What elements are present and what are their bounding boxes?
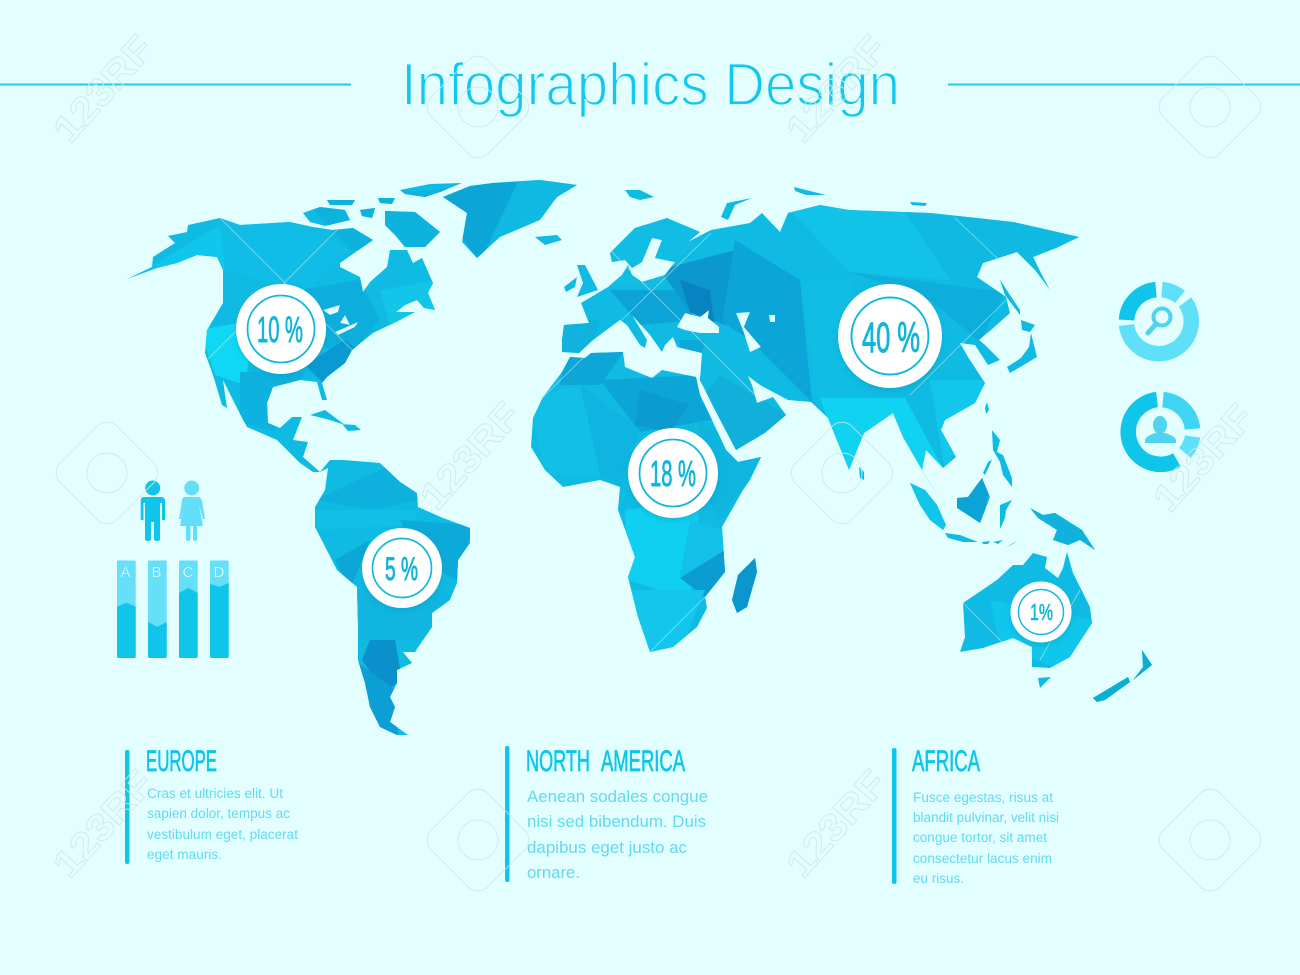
bar chart: A B C D: A xyxy=(120,564,131,581)
watermarks: 123RF xyxy=(778,763,895,886)
callout: 10%: 10 % xyxy=(257,309,303,350)
header rule left xyxy=(0,84,351,86)
text block: Africa: Fusce egestas, risus at xyxy=(913,790,1053,805)
text block: North America: ornare. xyxy=(527,863,580,882)
watermarks: 123RF xyxy=(412,395,529,518)
text block: Africa: blandit pulvinar, velit nisi xyxy=(913,810,1059,825)
text block: Europe xyxy=(125,745,298,864)
callout: 40%: 40 % xyxy=(862,314,920,362)
text block: Africa: AFRICA xyxy=(912,745,980,778)
icon: woman xyxy=(179,480,205,541)
callout: 1% xyxy=(1010,582,1072,642)
callout: 40% xyxy=(838,284,942,388)
text block: Europe: EUROPE xyxy=(146,745,217,778)
watermarks: 123RF xyxy=(45,763,162,886)
text block: Europe: vestibulum eget, placerat xyxy=(147,827,298,842)
callout: 18% xyxy=(628,428,718,518)
text block: North America: dapibus eget justo ac xyxy=(527,838,687,857)
icon: user donut xyxy=(1128,400,1192,464)
icon: search donut xyxy=(1126,290,1191,354)
watermarks: 123RF xyxy=(778,28,895,151)
text block: North America: nisi sed bibendum. Duis xyxy=(527,812,706,831)
world map xyxy=(120,175,1160,740)
text block: North America xyxy=(505,745,708,882)
bar chart: A B C D xyxy=(117,560,229,658)
text block: North America: NORTH xyxy=(526,745,590,778)
watermarks: 123RF xyxy=(45,28,162,151)
text block: North America: Aenean sodales congue xyxy=(527,787,708,806)
title: Infographics Design xyxy=(401,51,900,118)
callout: 18%: 18 % xyxy=(650,453,696,494)
text block: Europe: Cras et ultricies elit. Ut xyxy=(147,786,283,801)
watermarks: 123RF xyxy=(1145,397,1262,520)
bar chart: A B C D: B xyxy=(152,564,162,581)
bar chart: A B C D: C xyxy=(182,564,194,581)
callout: 1%: 1% xyxy=(1030,599,1053,625)
text block: Europe: sapien dolor, tempus ac xyxy=(147,806,290,821)
text block: Europe: eget mauris. xyxy=(147,847,222,862)
header rule right xyxy=(948,84,1300,86)
text block: Africa: consectetur lacus enim xyxy=(913,851,1052,866)
text block: Africa: congue tortor, sit amet xyxy=(913,830,1047,845)
bar chart: A B C D: D xyxy=(214,564,224,581)
text block: Africa xyxy=(892,745,1059,886)
callout: 10% xyxy=(236,284,326,374)
callout: 5% xyxy=(362,528,442,608)
callout: 5%: 5 % xyxy=(385,551,418,587)
text block: Africa: eu risus. xyxy=(913,871,964,886)
icon: man xyxy=(141,480,165,541)
thin light diagonal lines xyxy=(207,218,1080,660)
text block: North America: AMERICA xyxy=(601,745,685,778)
